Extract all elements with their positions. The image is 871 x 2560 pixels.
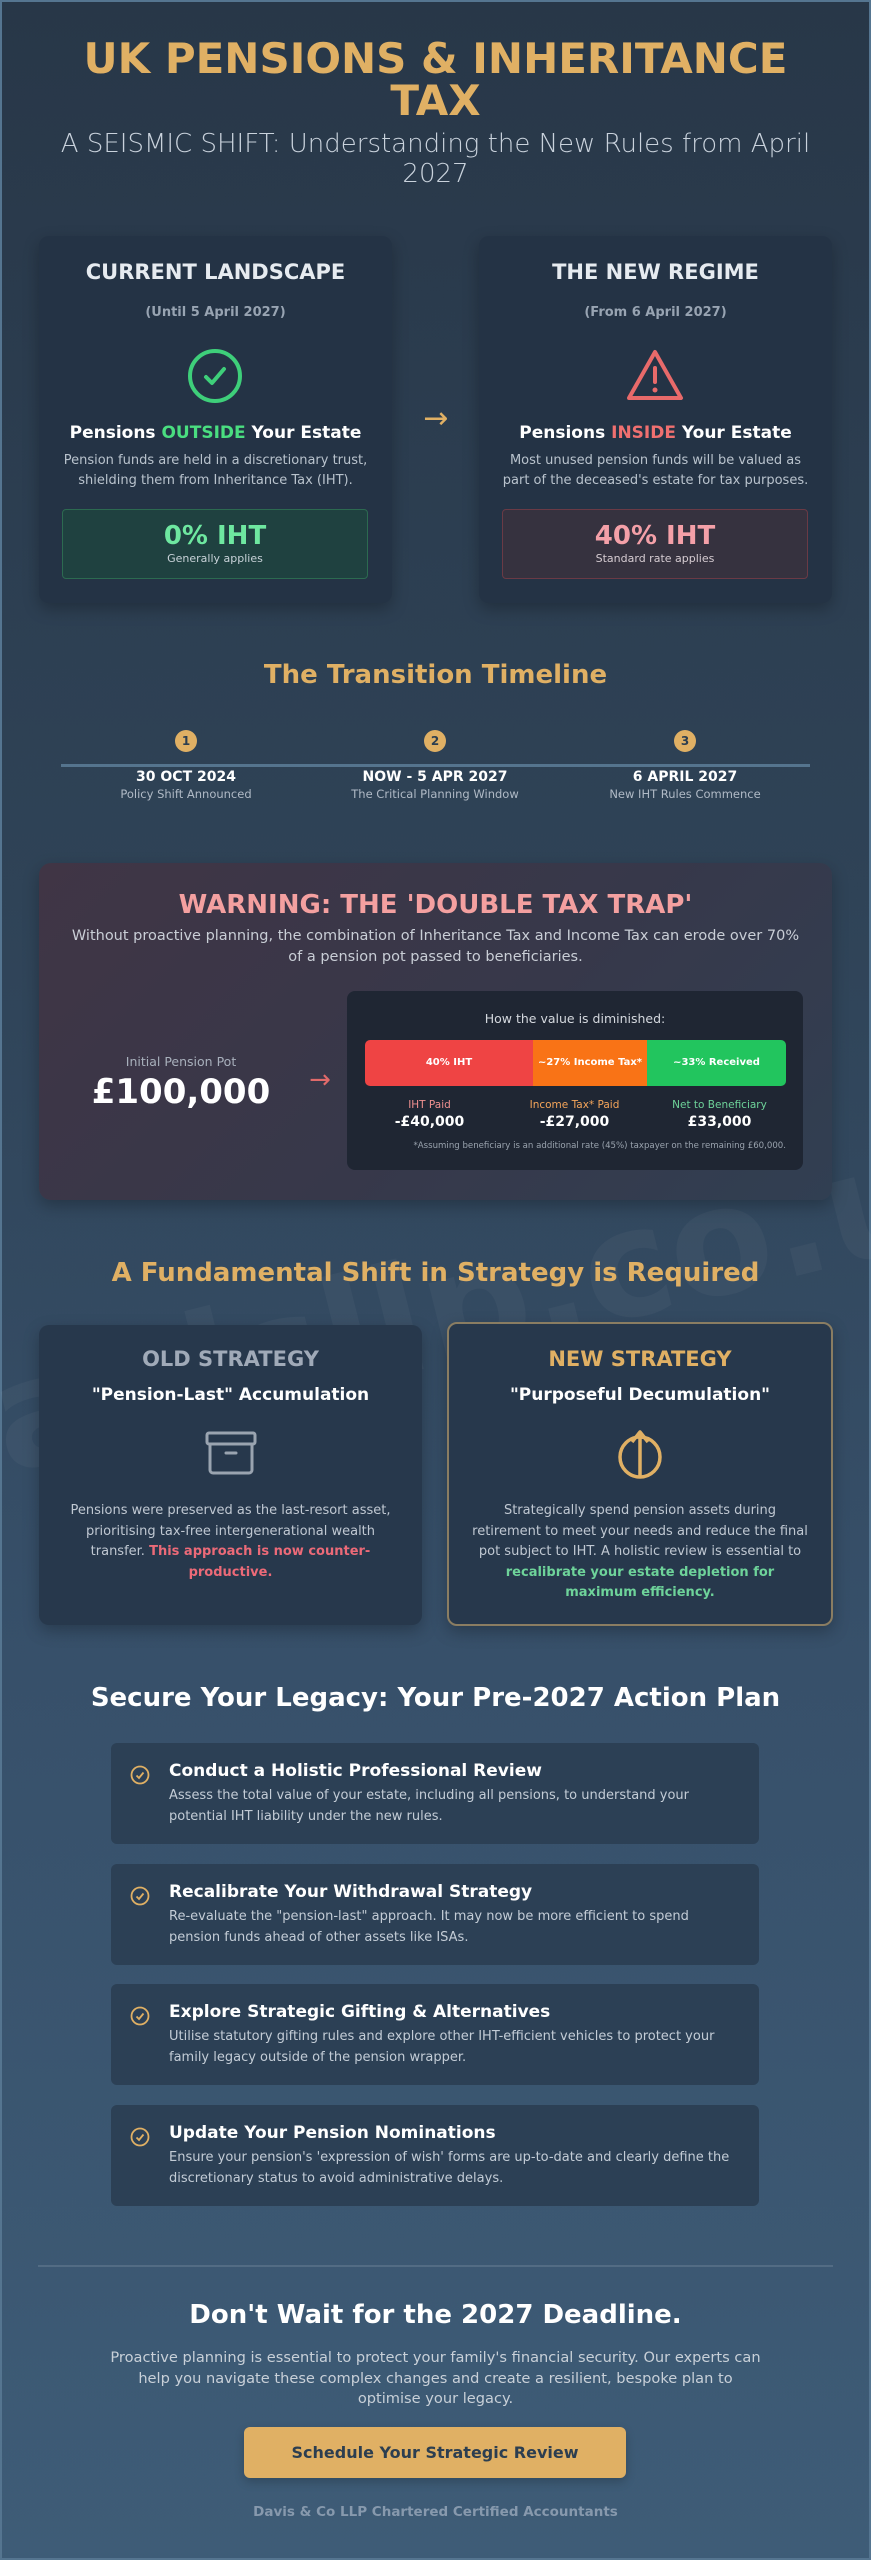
stacked bar: ~33% Received [673,1057,760,1068]
breakdown values [395,1099,767,1130]
panel: old strategy [39,1325,422,1625]
CTA button [244,2427,626,2478]
initial pot: Initial Pension Pot [126,1054,236,1069]
stat box: 40% IHT [595,521,715,551]
arrow: → [423,401,449,436]
chart: value diminished [347,991,803,1170]
description: Most unused pension funds will be valued as [510,453,801,468]
arrow: → [309,1065,331,1095]
milestone 3 [609,730,761,801]
milestone 2: 2 [431,734,439,748]
description: shielding them from Inheritance Tax (IHT). [78,473,353,488]
subheading: Pensions INSIDE Your Estate [519,423,792,443]
description: recalibrate your estate depletion for [506,1564,774,1580]
milestone 1: 30 OCT 2024 [136,769,236,785]
icon: compass [618,1430,662,1479]
subheading: Pensions OUTSIDE Your Estate [70,423,361,443]
stacked bar: 40% IHT [426,1057,472,1068]
action item 2 [111,1864,759,1965]
panel: new strategy [447,1322,833,1626]
milestone 2: NOW - 5 APR 2027 [363,769,507,785]
milestone 3: 3 [681,734,689,748]
warning text: of a pension pot passed to beneficiaries. [288,949,583,965]
stacked bar [365,1040,786,1086]
description: Pension funds are held in a discretionary trust, [64,453,367,468]
stat box [502,509,808,579]
panel: old strategy: "Pension-Last" Accumulation [92,1385,369,1405]
description: Pensions were preserved as the last-resort asset, [70,1503,390,1518]
milestone 1 [120,730,252,801]
footer: Davis & Co LLP Chartered Certified Accountants [253,2504,618,2520]
initial pot: £100,000 [92,1072,270,1112]
stat box: 0% IHT [164,521,266,551]
panel: new strategy: "Purposeful Decumulation" [510,1385,770,1405]
icon: warning [627,350,684,400]
heading: THE NEW REGIME [552,260,759,284]
description: productive. [189,1564,272,1580]
description [472,1503,808,1600]
panel: new strategy: NEW STRATEGY [548,1347,732,1371]
title: UK PENSIONS & INHERITANCE [84,34,787,83]
action item 4: Update Your Pension Nominations [169,2123,496,2143]
milestone 2: The Critical Planning Window [351,787,519,801]
warning text: Without proactive planning, the combination of Inheritance Tax and Income Tax can erode over 70% [72,928,799,944]
title [84,34,787,125]
description: prioritising tax-free intergenerational wealth [86,1524,375,1538]
action item 3: Utilise statutory gifting rules and explore other IHT-efficient vehicles to protect your family legacy outside of the pension wrapper. [169,2029,714,2065]
breakdown values: -£40,000 [395,1114,464,1130]
action item 1: Conduct a Holistic Professional Review [169,1761,542,1781]
panel: double tax trap warning [39,863,832,1200]
description: Strategically spend pension assets during [504,1503,776,1518]
description [64,453,367,488]
closing heading: Don't Wait for the 2027 Deadline. [189,2300,682,2330]
breakdown values: IHT Paid [408,1099,451,1111]
milestone 2 [351,730,519,801]
footnote: *Assuming beneficiary is an additional rate (45%) taxpayer on the remaining £60,000. [413,1141,786,1151]
action item 2: Re-evaluate the "pension-last" approach. It may now be more efficient to spend pension funds ahead of other assets like ISAs. [169,1909,689,1945]
subtitle: A SEISMIC SHIFT: Understanding the New Rules from April 2027 [61,129,810,189]
chart: value diminished: How the value is diminished: [485,1011,665,1026]
timeline [61,730,810,801]
timeline heading: The Transition Timeline [264,660,607,690]
action item 4: Ensure your pension's 'expression of wish' forms are up-to-date and clearly define the discretionary status to avoid administrative delays. [169,2150,729,2186]
description: maximum efficiency. [565,1585,715,1600]
breakdown values: Net to Beneficiary [672,1099,767,1111]
action item 1 [111,1743,759,1844]
title: TAX [390,76,481,125]
warning text [72,928,799,965]
CTA button: Schedule Your Strategic Review [291,2443,579,2462]
heading: CURRENT LANDSCAPE [86,260,345,284]
action item 1: Assess the total value of your estate, including all pensions, to understand your potential IHT liability under the new rules. [169,1788,689,1824]
initial pot [92,1054,270,1112]
milestone 3: New IHT Rules Commence [609,787,761,801]
icon: archive box [206,1432,256,1474]
stat box: Standard rate applies [596,552,714,565]
closing text: Proactive planning is essential to protect your family's financial security. Our experts can help you navigate these complex changes and create a resilient, bespoke plan to optimise your legacy. [110,2349,761,2407]
icon: check circle [188,349,242,403]
strategy heading: A Fundamental Shift in Strategy is Required [112,1258,759,1288]
stat box [62,509,368,579]
panel: old strategy: OLD STRATEGY [142,1347,319,1371]
description: retirement to meet your needs and reduce the final [472,1524,808,1538]
date: (Until 5 April 2027) [145,305,286,320]
milestone 3: 6 APRIL 2027 [633,769,737,785]
date: (From 6 April 2027) [584,305,727,320]
panel: current landscape [39,236,392,603]
milestone 1: Policy Shift Announced [120,787,252,801]
panel: new regime [479,236,832,603]
warning heading: WARNING: THE 'DOUBLE TAX TRAP' [179,890,692,920]
stacked bar: ~27% Income Tax* [538,1057,642,1068]
breakdown values: £33,000 [688,1114,751,1130]
action plan heading: Secure Your Legacy: Your Pre-2027 Action Plan [91,1683,780,1713]
action item 3: Explore Strategic Gifting & Alternatives [169,2002,550,2022]
stat box: Generally applies [167,552,263,565]
description: part of the deceased's estate for tax purposes. [503,473,808,488]
breakdown values: -£27,000 [540,1114,609,1130]
action item 4 [111,2105,759,2206]
milestone 1: 1 [182,734,190,748]
description: pot subject to IHT. A holistic review is essential to [479,1544,801,1559]
action item 3 [111,1984,759,2085]
description [70,1503,390,1580]
description: transfer. This approach is now counter- [91,1544,370,1559]
description [503,453,808,488]
breakdown values: Income Tax* Paid [530,1099,619,1111]
action item 2: Recalibrate Your Withdrawal Strategy [169,1882,532,1902]
